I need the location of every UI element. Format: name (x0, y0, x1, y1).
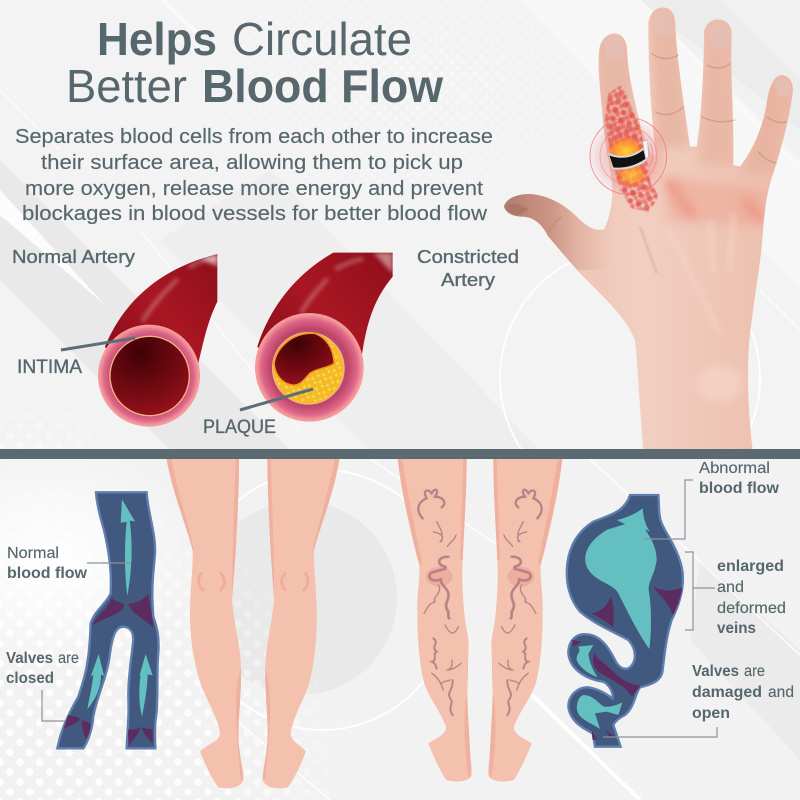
label: constricted artery: Artery (441, 270, 495, 290)
callout: abnormal blood flow (643, 460, 780, 539)
normal vein diagram (57, 492, 159, 748)
hand silhouette (504, 8, 793, 449)
title: Better (66, 60, 187, 112)
callout: plaque (203, 389, 313, 438)
lower background (0, 440, 800, 800)
finger creases (548, 53, 787, 233)
label: normal artery: Normal Artery (12, 247, 135, 267)
callout: valves damaged and open: damaged (692, 684, 762, 701)
abnormal vein diagram (567, 495, 683, 747)
description text: blockages in blood vessels for better blood flow (22, 203, 488, 225)
right varicose leg (488, 459, 562, 781)
callout: plaque: PLAQUE (203, 417, 276, 438)
damaged valves (572, 587, 682, 740)
normal artery illustration (98, 254, 217, 427)
constricted artery illustration (255, 253, 393, 422)
callout: enlarged and deformed veins: deformed (717, 600, 786, 617)
callout: abnormal blood flow: Abnormal (699, 460, 770, 477)
fire glow (606, 135, 646, 168)
hand with ring (504, 8, 793, 449)
vein body (57, 492, 159, 748)
title: Circulate (232, 13, 412, 65)
callout: enlarged and deformed veins (685, 552, 786, 637)
callout: enlarged and deformed veins: veins (717, 620, 756, 637)
flow arrow lower left (87, 654, 104, 709)
callout: normal blood flow: blood flow (7, 565, 88, 582)
callout: valves closed: are (58, 650, 79, 667)
heat glow and rings (589, 117, 668, 195)
callout: valves damaged and open: are (744, 663, 765, 680)
callout: intima (17, 338, 135, 378)
flow arrow lower right (139, 654, 153, 717)
varicose legs (398, 459, 562, 781)
callout: normal blood flow (7, 545, 131, 582)
callout: valves damaged and open: and (768, 684, 794, 701)
smart ring (608, 140, 648, 170)
left varicose leg (398, 459, 472, 781)
description text: Separates blood cells from each other to increase (15, 126, 493, 148)
label: constricted artery: Constricted (417, 247, 519, 267)
callout: valves closed: closed (6, 670, 54, 687)
callout: valves damaged and open (603, 663, 794, 737)
description text: more oxygen, release more energy and prevent (25, 178, 483, 200)
plaque deposit (273, 333, 344, 404)
left normal leg (167, 459, 243, 788)
right normal leg (263, 459, 339, 788)
callout: valves closed: Valves (6, 650, 53, 667)
callout: valves damaged and open: Valves (692, 663, 739, 680)
title: Helps (97, 13, 217, 65)
callout: abnormal blood flow: blood flow (699, 480, 780, 497)
label: constricted artery (417, 247, 519, 290)
callout: enlarged and deformed veins: enlarged (717, 558, 784, 575)
description text (15, 126, 493, 225)
small flow areas (577, 645, 622, 729)
valves closed (63, 594, 153, 746)
fingernails (506, 10, 791, 215)
callout: normal blood flow: Normal (7, 545, 59, 562)
divider bar (0, 449, 800, 459)
callout: enlarged and deformed veins: and (717, 579, 744, 596)
abnormal flow (585, 508, 657, 649)
description text: their surface area, allowing them to pick up (41, 152, 463, 174)
vein body (567, 495, 683, 747)
normal legs (167, 459, 339, 788)
title: Blood Flow (202, 60, 443, 112)
title (66, 13, 443, 112)
callout: valves closed (6, 650, 79, 721)
veins (418, 490, 461, 715)
flow arrow up top (121, 499, 135, 596)
callout: valves damaged and open: open (692, 705, 730, 722)
callout: intima: INTIMA (17, 357, 82, 378)
red blood cells (605, 85, 659, 212)
